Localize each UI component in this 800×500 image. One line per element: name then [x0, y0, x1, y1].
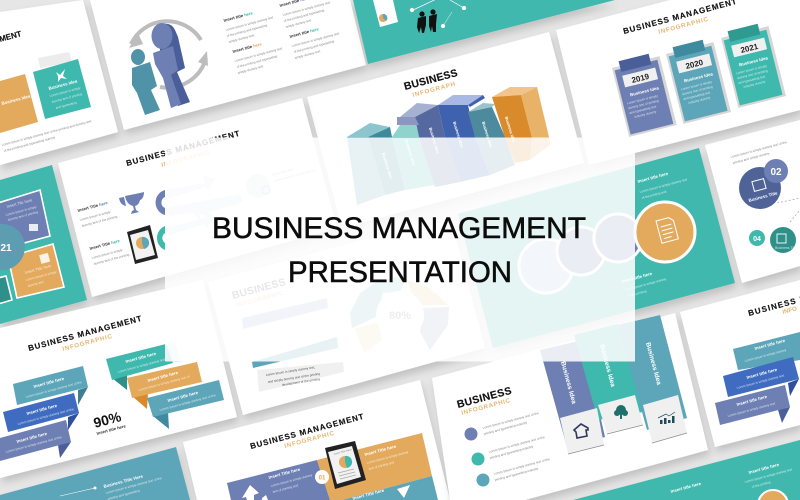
panel: teal cards slide: dummy text — [27, 280, 44, 288]
text blocks: Lorem Ipsum is simply — [91, 248, 123, 260]
ribbon: left 3 — [0, 420, 71, 461]
3D bar: teal blue — [468, 103, 515, 175]
ribbon: left 3: Lorem Ipsum is simply dummy text of the — [5, 435, 62, 454]
ribbon: right 3: Lorem Ipsum is simply dummy text of the — [159, 393, 216, 412]
panel: right circles slide: printing and simply dummy — [732, 151, 770, 165]
text blocks: of the printing — [627, 289, 647, 298]
box: home icon — [560, 408, 604, 454]
panel: top-left slide with product cards: Business Idea — [48, 78, 78, 91]
card: 2020: Lorem Ipsum is simply — [681, 80, 713, 91]
panel: ribbons and 90 percent slide: INFOGRAPHIC — [62, 333, 113, 353]
text blocks: of the printing and typesetting — [226, 23, 268, 38]
title: PRESENTATION — [288, 256, 512, 289]
ribbon 1: Lorem Ipsum is simply dummy — [744, 348, 787, 363]
bar labels: Business Idea — [504, 116, 517, 144]
panel: top-left slide with product cards: dummy text of printing — [51, 92, 83, 104]
panel: three columns slide: BUSINESS — [456, 385, 513, 411]
panel: bottom teal slide: of the printing — [751, 480, 771, 489]
title: BUSINESS MANAGEMENT — [212, 212, 586, 245]
icon: tablet — [127, 225, 158, 264]
ribbon: right 1: Lorem Ipsum is simply dummy text — [117, 357, 166, 374]
text blocks: simply dummy text — [285, 18, 312, 29]
text blocks: Lorem Ipsum is simply dummy — [624, 277, 667, 292]
card: 2019: and typesetting text — [629, 104, 657, 115]
text blocks: Lorem Ipsum is simply dummy text — [639, 177, 688, 194]
box: tree icon — [598, 395, 643, 434]
panel: teal cards slide: Lorem Ipsum is simply — [25, 270, 57, 282]
panel: three columns slide — [432, 313, 708, 500]
panel: bottom-left blue slide: Lorem Ipsum is simply dummy text of the — [105, 476, 162, 495]
arrow track top — [156, 175, 243, 220]
ribbon: left 2 — [3, 393, 79, 432]
card: 2019: Lorem Ipsum is simply — [627, 94, 659, 105]
panel: people slide — [90, 0, 366, 130]
stat: 90 percent: 90% — [92, 408, 123, 431]
text blocks — [77, 167, 316, 266]
ribbon 2: Lorem Ipsum is simply dummy text — [736, 373, 785, 390]
panel: bottom teal slide: Insert title here — [670, 481, 702, 494]
panel: right ribbons slide — [680, 280, 800, 447]
ribbon: left 1 — [13, 366, 88, 405]
3D bar: teal — [392, 125, 435, 190]
panel: donut 80 percent slide: INFOGRAPHIC — [236, 290, 284, 309]
title — [212, 212, 586, 289]
panel: business infograph 3D bars slide — [307, 32, 584, 228]
ribbon 2 — [723, 357, 799, 397]
list item A: printing and typesetting industry — [483, 420, 528, 436]
panel: teal cards slide: Insert Tile here — [6, 197, 34, 209]
ribbon 3 — [715, 385, 790, 425]
card: 2019: industry dummy — [634, 110, 657, 119]
panel: teal cards slide: Insert Title here — [24, 263, 53, 275]
ribbon 3: Lorem Ipsum is simply dummy text — [727, 401, 776, 418]
text blocks: simply dummy text — [294, 49, 321, 60]
ribbon: left 3: Insert title here — [16, 431, 48, 444]
text blocks: Insert title here — [232, 41, 263, 54]
network dots — [410, 0, 466, 28]
panel: year cards slide — [556, 0, 800, 165]
text blocks: Lorem Ipsum is simply dummy — [270, 473, 313, 488]
box: chart icon — [643, 395, 687, 443]
card: 2019: Business Idea — [629, 85, 660, 97]
list item A — [464, 411, 539, 440]
column 2 — [574, 324, 643, 420]
column 2: Business Idea — [598, 344, 616, 388]
text blocks: Lorem Ipsum is simply — [79, 210, 111, 222]
circle: business title — [739, 167, 781, 209]
text blocks: text of printing and — [272, 483, 299, 494]
ribbon: right 1: Insert title here — [125, 351, 157, 364]
ribbon: right 2: Insert title here — [147, 370, 179, 383]
text block: Lorem Ipsum is simply dummy text, — [266, 365, 316, 377]
circle: 04 — [749, 230, 765, 246]
text blocks: of the printing and typesetting — [283, 8, 325, 23]
panel: bottom teal slide — [573, 440, 800, 500]
list item C — [476, 457, 550, 486]
circle: business title: Business Title — [748, 190, 778, 203]
panel: bottom-left blue slide: Business Title Here — [103, 473, 144, 489]
text blocks: Lorem Ipsum is simply dummy text — [291, 31, 340, 48]
text blocks: Lorem Ipsum is simply dummy text — [282, 0, 331, 17]
text blocks: text of printing and — [368, 460, 395, 471]
bar labels: Business Idea — [381, 152, 394, 180]
card: 2021: Business Idea — [738, 55, 769, 67]
text blocks: Insert title here — [637, 171, 669, 184]
bar labels: Business Idea — [452, 121, 465, 149]
text blocks: Insert title here — [621, 271, 653, 284]
panel: bottom teal slide: Lorem Ipsum is simply dummy text — [744, 467, 793, 484]
panel: top-left slide with product cards: Lorem Ipsum is simply — [49, 86, 81, 98]
text block — [266, 365, 321, 387]
card: 2020: industry dummy — [688, 96, 711, 105]
circle: 02: 02 — [770, 167, 782, 178]
panel: teal cards slide: Lorem Ipsum is simply — [5, 205, 37, 217]
text blocks — [223, 0, 340, 75]
panel: teal circles slide — [458, 148, 735, 348]
text blocks: Insert Title here — [268, 467, 301, 480]
ribbon: left 2: Insert title here — [26, 403, 58, 416]
panel: donut 80 percent slide: BUSINESS — [231, 276, 287, 302]
card: 2020: and typesetting text — [683, 90, 711, 101]
card: 2019 — [611, 51, 677, 137]
overlay panel — [165, 138, 635, 362]
circle: business title 04 — [770, 227, 797, 253]
panel: bottom-left blue slide — [0, 447, 190, 500]
panel: ribbons and 90 percent slide — [0, 280, 237, 478]
panel: teal cards slide: dummy text of printing — [7, 210, 39, 222]
ribbon 3: Insert title here — [736, 394, 768, 407]
panel: tablet slide — [183, 380, 450, 500]
stat: 90 percent: Insert title here — [96, 423, 127, 436]
panel: three columns slide: INFOGRAPHIC — [461, 397, 511, 417]
text blocks: Insert Title here — [364, 444, 397, 457]
panel: top-left slide with product cards: and typesetting — [55, 100, 77, 110]
badge: 01 — [315, 470, 329, 484]
icon: document circle — [635, 202, 695, 262]
card: 2021 — [720, 21, 786, 108]
card: 2020: 2020 — [685, 58, 705, 71]
ribbon: right 3: Insert title here — [167, 390, 199, 403]
panel: business infograph 3D bars slide: INFOGRAPH — [412, 81, 457, 99]
text blocks: Insert Title here — [77, 200, 109, 213]
text blocks: Insert Title here — [89, 238, 121, 251]
card: 2021: and typesetting text — [738, 74, 766, 85]
card: 2021: 2021 — [740, 42, 760, 55]
bar labels: Business Idea — [481, 121, 494, 149]
panel: year cards slide: INFOGRAPHIC — [658, 16, 709, 36]
panel: trophy and arrows slide: INFOGRAPHIC — [161, 149, 211, 169]
arrow track bottom — [157, 211, 215, 250]
card: 2020 — [665, 37, 731, 124]
circle: 02 — [764, 159, 788, 183]
text blocks: Insert Title here — [271, 167, 294, 177]
panel: top-left slide with product cards: Business Idea — [1, 93, 31, 106]
text blocks: of the printing and typesetting — [293, 39, 335, 54]
ribbon: right 1 — [106, 342, 181, 390]
ribbon 1: Insert title here — [754, 338, 786, 351]
text blocks: dummy text of the printing — [93, 253, 130, 266]
panel: bottom teal slide: Insert title here — [748, 462, 780, 475]
ribbon: left 1: Insert title here — [33, 376, 65, 389]
column 3 — [618, 315, 687, 430]
panel: top teal slide — [353, 0, 615, 64]
text blocks: of the printing and typesetting — [236, 54, 278, 69]
panel: teal cards slide: 21 — [0, 243, 12, 254]
icon: tablet with pie chart: Insert Title Here — [333, 447, 352, 456]
panel: top-left slide with product cards — [0, 0, 118, 165]
panel: right ribbons slide: INFO — [782, 305, 798, 316]
text blocks: Insert title here — [289, 26, 320, 39]
column 3: Business Idea — [644, 342, 662, 386]
text block: development of the printing — [282, 377, 320, 387]
ribbon: right 3 — [147, 380, 224, 429]
ribbon: right 2 — [127, 362, 202, 409]
bands — [242, 298, 328, 329]
text blocks: simply dummy text — [237, 64, 264, 75]
text blocks: Lorem Ipsum is simply dummy — [366, 450, 409, 465]
icon: trophy — [119, 192, 144, 214]
panel: donut 80 percent slide — [208, 216, 485, 415]
ribbon 2: Insert title here — [746, 367, 778, 380]
column 1: Business Idea — [559, 361, 577, 405]
chain of circles — [519, 214, 642, 293]
panel: trophy and arrows slide — [58, 98, 337, 297]
ribbon: left 2: Lorem Ipsum is simply dummy text of the — [17, 407, 74, 426]
card: 2020: Business Idea — [683, 71, 714, 83]
panel: trophy and arrows slide: BUSINESS MANAGEMENT — [125, 129, 241, 168]
icon: business people — [417, 9, 437, 33]
panel: tablet slide: INFOGRAPHIC — [284, 430, 335, 450]
panel: business infograph 3D bars slide: BUSINESS — [403, 67, 459, 93]
card: 2019: dummy text of printing — [628, 99, 659, 110]
card: 2021: Lorem Ipsum is simply — [736, 64, 768, 75]
3D bar: royal blue — [438, 95, 490, 182]
panel: ribbons and 90 percent slide: BUSINESS MANAGEMENT — [27, 314, 143, 353]
panel: tablet slide: BUSINESS MANAGEMENT — [249, 412, 365, 451]
panel: right circles slide: Lorem Ipsum is simply dummy text of the — [730, 140, 787, 159]
icon: tall person — [152, 23, 190, 108]
3D bar: periwinkle — [397, 103, 460, 187]
donut chart — [350, 277, 449, 353]
panel: right circles slide — [705, 120, 800, 283]
column 1 — [540, 340, 605, 447]
badge: 01: 01 — [319, 476, 326, 482]
3D bar: orange — [492, 87, 550, 163]
text block: and simply dummy text of the printing — [268, 372, 321, 384]
card: 2019: 2019 — [631, 72, 651, 85]
text blocks: simply dummy text — [228, 33, 255, 44]
ribbon 1 — [733, 332, 800, 370]
list item A: Lorem Ipsum is simply dummy text of the — [482, 411, 539, 430]
text blocks: of the printing and — [641, 189, 667, 200]
list item B: printing and typesetting industry — [489, 444, 534, 460]
card: 2020: dummy text of printing — [682, 85, 713, 96]
circle: 04: 04 — [753, 236, 761, 243]
donut chart: 80% — [389, 310, 411, 322]
panel: top-left slide with product cards: of the printing and typesetting dummy — [3, 135, 56, 153]
bar labels: Business Idea — [428, 127, 441, 155]
bar labels — [381, 116, 517, 180]
list item C: Lorem Ipsum is simply dummy text of the — [493, 457, 550, 476]
text blocks — [621, 171, 688, 298]
bar labels: Business Idea — [404, 139, 417, 167]
icon: short person — [131, 49, 160, 115]
text blocks: Lorem Ipsum is simply dummy text — [225, 15, 274, 32]
list item B — [472, 435, 545, 466]
3D bar: first teal blue — [347, 123, 405, 205]
panel: teal cards slide — [0, 165, 87, 324]
text blocks — [268, 444, 409, 500]
panel: top-left slide with product cards: Lorem Ipsum is simply dummy text of the printing and dummy text — [1, 119, 92, 147]
list item C: printing and typesetting industry — [494, 466, 539, 482]
text blocks: dummy text of the printing — [81, 215, 118, 228]
circle: business title 04: Business Title — [775, 246, 797, 250]
icon: cycle arrows — [129, 21, 208, 88]
text blocks: Insert title here — [223, 10, 254, 23]
icon: up arrows — [242, 485, 410, 500]
ribbon: left 1: Lorem Ipsum is simply dummy text of the — [25, 380, 82, 399]
text blocks: Lorem Ipsum is simply dummy text — [234, 46, 283, 63]
ribbon: right 2: Lorem Ipsum is simply dummy text of — [138, 374, 190, 392]
text blocks: Lorem Ipsum is simply dummy — [273, 168, 316, 183]
icon: tablet with pie chart — [325, 441, 366, 489]
card: 2021: dummy text of printing — [737, 69, 768, 80]
icon: globe — [246, 174, 270, 198]
list item B: Lorem Ipsum is simply dummy text of the — [488, 435, 545, 454]
card: 2021: industry dummy — [743, 80, 766, 89]
